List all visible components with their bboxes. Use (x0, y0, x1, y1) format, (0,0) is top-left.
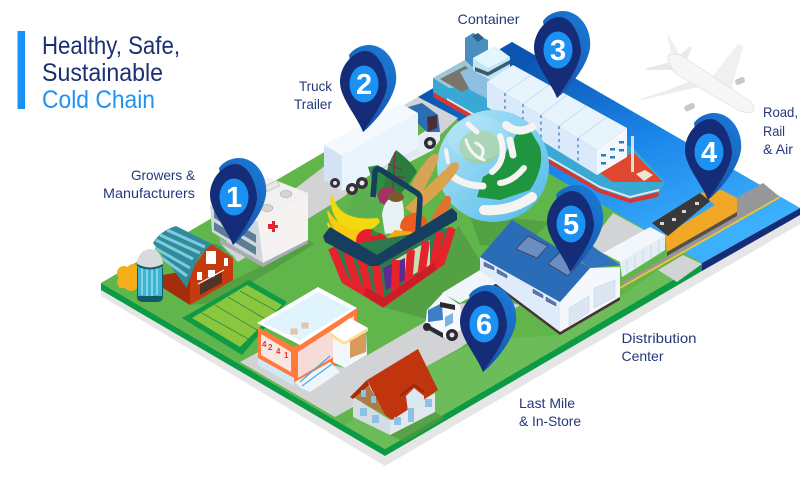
house (350, 349, 438, 435)
pin 3 (534, 11, 590, 98)
barn (153, 226, 237, 305)
trailer truck (324, 103, 440, 195)
label: distribution center: Distribution (622, 330, 696, 346)
store entrance (295, 318, 368, 392)
label: truck trailer (294, 78, 333, 112)
container ship (433, 33, 665, 203)
label: truck trailer: Truck (299, 78, 333, 94)
warehouse (480, 220, 620, 335)
bridge and funnel (460, 33, 510, 100)
label: last mile and in-store (519, 395, 581, 429)
pin 2 (340, 45, 396, 132)
label: road rail and air: Road, (763, 104, 798, 120)
chard (368, 150, 417, 205)
label: distribution center: Center (622, 348, 664, 364)
pin 6: 6 (476, 309, 492, 341)
delivery truck (423, 270, 497, 341)
pin 1 (210, 158, 266, 245)
pin 4 (685, 113, 741, 200)
pin 5: 5 (563, 209, 579, 241)
store: 4 (262, 340, 267, 349)
label: growers and manufacturers: Growers & (131, 167, 196, 183)
silo (137, 249, 163, 302)
basket rim (323, 208, 457, 266)
label: road rail and air: Rail (763, 123, 785, 139)
shopping basket (323, 150, 459, 307)
pin 1: 1 (226, 182, 242, 214)
factory building (210, 177, 308, 267)
title: Healthy, Safe, (42, 32, 180, 60)
produce (327, 188, 451, 256)
pin 2: 2 (356, 69, 372, 101)
rail track (620, 183, 780, 288)
icon: hay bales (117, 264, 139, 291)
title: Cold Chain (42, 86, 155, 114)
baguettes (405, 154, 459, 214)
title (42, 32, 180, 114)
basket body (330, 227, 453, 307)
label: road rail and air (763, 104, 798, 157)
ground shadows (190, 217, 550, 442)
label: truck trailer: Trailer (294, 96, 332, 112)
store: 4 (276, 347, 281, 356)
label: container: Container (458, 11, 520, 27)
title accent bar (18, 31, 25, 109)
label: growers and manufacturers (103, 167, 196, 201)
pin 6 (460, 285, 516, 372)
store: 1 (284, 351, 289, 360)
freight train (603, 190, 737, 277)
label: distribution center (622, 330, 696, 364)
pin 4: 4 (701, 137, 717, 169)
platform base (101, 42, 800, 466)
store (257, 287, 368, 392)
label: last mile and in-store: & In-Store (519, 413, 581, 429)
containers (487, 65, 627, 175)
label: growers and manufacturers: Manufacturers (103, 185, 195, 201)
icon: red cross (268, 221, 278, 232)
pin 3: 3 (550, 35, 566, 67)
globe (437, 110, 549, 222)
title: Sustainable (42, 59, 163, 87)
basket handle (373, 169, 420, 232)
label: last mile and in-store: Last Mile (519, 395, 575, 411)
airplane (640, 33, 754, 113)
label: road rail and air: & Air (763, 141, 793, 157)
store: 2 (268, 343, 273, 352)
pin 5 (547, 185, 603, 272)
field (182, 280, 287, 355)
